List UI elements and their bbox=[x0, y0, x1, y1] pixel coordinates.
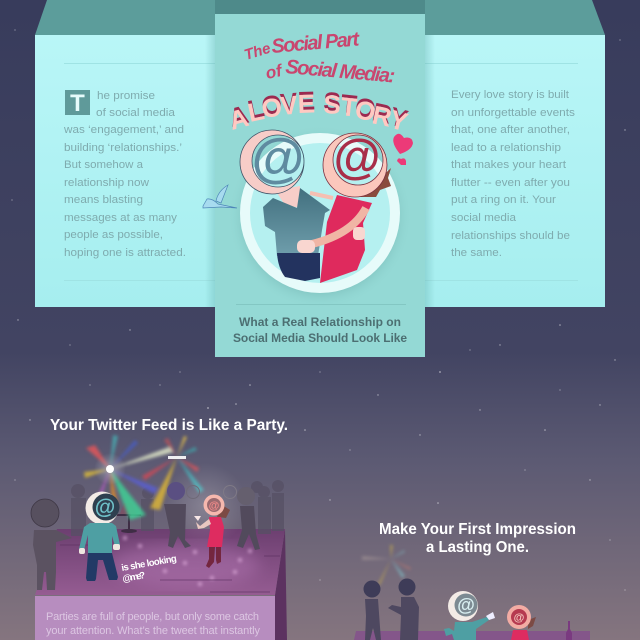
woman arm and hands bbox=[312, 208, 366, 244]
left foreground figure bbox=[31, 499, 72, 590]
left paragraph: relationship now bbox=[64, 177, 149, 189]
man with at-sign head bbox=[444, 591, 495, 640]
floor lines bbox=[60, 545, 280, 592]
heading: Your Twitter Feed is Like a Party.: Your Twitter Feed is Like a Party. bbox=[50, 417, 288, 434]
wine bottle bbox=[566, 621, 572, 640]
title script line one: The bbox=[242, 40, 273, 64]
man with at-sign head: @ bbox=[95, 496, 115, 519]
drop cap T bbox=[65, 90, 90, 117]
stage bbox=[354, 631, 590, 640]
table bbox=[116, 503, 141, 533]
caption text: What a Real Relationship on bbox=[239, 315, 401, 329]
right paragraph: put a ring on it. Your bbox=[451, 194, 556, 206]
light beams bbox=[84, 435, 204, 520]
soft light on floor bbox=[110, 543, 260, 587]
back crowd silhouettes bbox=[71, 480, 284, 536]
illustration: party scene bbox=[31, 435, 287, 640]
right paragraph: that makes your heart bbox=[451, 159, 566, 171]
speech: is she looking @ me?: @ me? bbox=[122, 570, 146, 585]
icon: large heart bbox=[393, 134, 413, 154]
drop cap T: T bbox=[70, 90, 85, 117]
title script line one bbox=[242, 28, 361, 64]
illustration: couple in circle bbox=[228, 125, 412, 309]
left paragraph: of social media bbox=[96, 107, 176, 119]
speech: is she looking @ me?: is she looking bbox=[121, 553, 178, 574]
right paragraph: on unforgettable events bbox=[451, 107, 576, 119]
right paragraph bbox=[451, 89, 576, 259]
heading: Make Your First Impression a Lasting One.: a Lasting One. bbox=[426, 539, 529, 556]
left paragraph: means blasting bbox=[64, 194, 143, 206]
small disco light bbox=[362, 545, 411, 585]
caption text bbox=[233, 315, 407, 345]
woman dress bbox=[320, 195, 372, 283]
caption text: Social Media Should Look Like bbox=[233, 331, 407, 345]
title script line two: of bbox=[264, 61, 286, 83]
woman with at-sign head bbox=[194, 494, 230, 568]
mid crowd silhouettes bbox=[164, 482, 260, 550]
man arm bbox=[310, 193, 333, 198]
man pants bbox=[277, 253, 320, 281]
man head: at sign: @ bbox=[252, 128, 304, 188]
left paragraph bbox=[63, 90, 186, 259]
left paragraph: hoping one is attracted. bbox=[64, 247, 186, 259]
man shirt bbox=[263, 188, 330, 256]
right paragraph: that, one after another, bbox=[451, 124, 570, 136]
glow behind woman bbox=[163, 463, 247, 547]
man with at-sign head: @ bbox=[457, 595, 475, 615]
left paragraph: building ‘relationships.’ bbox=[64, 142, 182, 154]
illustration: first impression scene bbox=[354, 545, 590, 640]
left paragraph: people as possible, bbox=[64, 229, 163, 241]
woman head: at sign bbox=[323, 131, 387, 197]
panel: right text card bbox=[425, 35, 605, 307]
folder top flap bbox=[35, 0, 605, 35]
heading: Make Your First Impression a Lasting One. bbox=[379, 521, 576, 556]
left paragraph: But somehow a bbox=[64, 159, 144, 171]
right side of stage bbox=[275, 529, 287, 640]
right paragraph: lead to a relationship bbox=[451, 142, 561, 154]
woman with at-sign head: @ bbox=[209, 500, 220, 512]
right paragraph: the same. bbox=[451, 247, 502, 259]
man with at-sign head bbox=[79, 492, 120, 581]
panel: party text card bbox=[35, 596, 275, 640]
left paragraph: messages at as many bbox=[64, 212, 178, 224]
icon: small heart bbox=[397, 158, 406, 165]
panel: party text card: Parties are full of people, but only some catch bbox=[46, 611, 259, 623]
stage floor bbox=[35, 529, 285, 595]
silhouette figure left bbox=[364, 580, 381, 640]
woman with at-sign head bbox=[507, 605, 536, 640]
right paragraph: relationships should be bbox=[451, 230, 570, 242]
caption rule bbox=[236, 304, 406, 305]
disco light centers bbox=[94, 453, 186, 485]
right paragraph: social media bbox=[451, 212, 517, 224]
silhouette figure right bbox=[388, 578, 419, 640]
panel: center title card bbox=[215, 14, 425, 357]
woman with at-sign head: @ bbox=[514, 612, 525, 624]
panel: left intro text card bbox=[35, 35, 215, 307]
heading: Make Your First Impression a Lasting One.: Make Your First Impression bbox=[379, 521, 576, 538]
woman head: at sign: @ bbox=[334, 131, 380, 184]
man neck bbox=[275, 186, 300, 208]
title script line two: Social Media: bbox=[285, 56, 396, 88]
woman hair bbox=[352, 168, 391, 197]
title: A LOVE STORY: A LOVE STORY bbox=[226, 85, 411, 134]
panel: party text card: your attention. What’s the tweet that instantly bbox=[46, 625, 260, 637]
center panel top band bbox=[215, 0, 425, 14]
title script line one: Social Part bbox=[271, 28, 361, 58]
floor light dots bbox=[123, 536, 252, 586]
left paragraph: was ‘engagement,’ and bbox=[63, 124, 184, 136]
right paragraph: flutter -- even after you bbox=[451, 177, 570, 189]
right paragraph: Every love story is built bbox=[451, 89, 569, 101]
icon: blue bird bbox=[203, 185, 237, 208]
left paragraph: he promise bbox=[97, 90, 155, 102]
speech: is she looking @ me? bbox=[121, 553, 178, 585]
title: A LOVE STORY: A LOVE STORY bbox=[226, 88, 411, 137]
